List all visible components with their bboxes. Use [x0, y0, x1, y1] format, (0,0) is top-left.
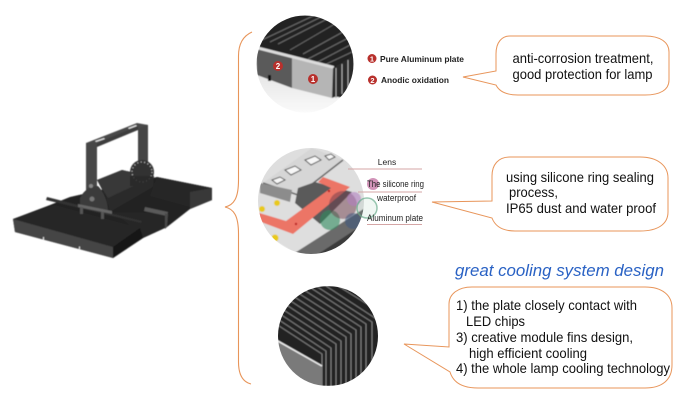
left pivot plate — [80, 186, 108, 211]
callout: cooling features: 4) the whole lamp cooling technology — [456, 360, 670, 376]
right rail — [144, 207, 168, 216]
callout: anti-corrosion — [463, 36, 669, 95]
callout: silicone sealing: using silicone ring sealing — [506, 169, 654, 185]
circle 2: exploded sealing diagram — [256, 146, 367, 258]
label: lens — [348, 157, 422, 169]
lower dark strip — [296, 208, 364, 254]
callout: silicone sealing: process, — [509, 184, 558, 200]
heading: great cooling system design: great cooling system design — [455, 261, 664, 280]
callout: anti-corrosion: anti-corrosion treatment, — [512, 50, 654, 66]
legend: pure aluminum plate: 1 — [370, 54, 374, 64]
front panel side fins — [113, 228, 143, 258]
badge 2 on photo: 2 — [276, 62, 281, 71]
callout: silicone sealing — [432, 157, 668, 231]
front panel top — [13, 205, 140, 247]
orange curly brace — [225, 32, 252, 384]
circle 1: plate close-up — [256, 15, 354, 113]
callout: anti-corrosion: good protection for lamp — [512, 66, 653, 82]
yellow screws — [274, 200, 280, 206]
green ring marker — [357, 198, 377, 218]
cross bar — [46, 197, 142, 223]
legend: anodic oxidation: 2 — [370, 76, 375, 85]
callout: cooling features: LED chips — [466, 313, 525, 329]
lens plate — [269, 154, 332, 192]
bracket right arm — [138, 124, 148, 168]
label: silicone ring waterproof: waterproof — [376, 193, 416, 203]
dark gasket plate — [295, 182, 352, 224]
label: lens: Lens — [378, 157, 396, 167]
label: silicone ring waterproof — [358, 178, 424, 203]
legend: pure aluminum plate: Pure Aluminum plate — [380, 54, 464, 64]
callout: cooling features — [404, 287, 672, 388]
label: aluminum plate: Aluminum plate — [367, 213, 423, 223]
callout: cooling features: 3) creative module fins design, — [456, 329, 633, 345]
badge 1 on photo — [308, 74, 318, 84]
back right panel top — [150, 177, 212, 207]
right dial — [130, 160, 154, 184]
red silicone ring — [256, 177, 350, 234]
circle 3: heat sink fins — [276, 286, 380, 386]
badge 1 on photo: 1 — [311, 75, 316, 84]
driver box — [97, 170, 153, 212]
colored highlight blobs — [320, 210, 340, 230]
middle fins — [112, 212, 167, 238]
bracket top band — [86, 123, 148, 143]
callout: cooling features: high efficient cooling — [469, 345, 587, 361]
frame block — [260, 183, 292, 202]
callout: silicone sealing: IP65 dust and water proof — [506, 200, 656, 216]
label: silicone ring waterproof: The silicone ring — [367, 179, 424, 189]
bracket left arm — [86, 143, 97, 190]
front panel face — [13, 219, 113, 258]
mounting foot bar — [78, 204, 112, 214]
callout: cooling features: 1) the plate closely contact with — [456, 297, 637, 313]
product photo: LED flood light — [13, 123, 212, 258]
badge 2 on photo — [273, 61, 283, 71]
lamp body silhouette — [13, 177, 212, 258]
legend: anodic oxidation: Anodic oxidation — [381, 75, 449, 85]
